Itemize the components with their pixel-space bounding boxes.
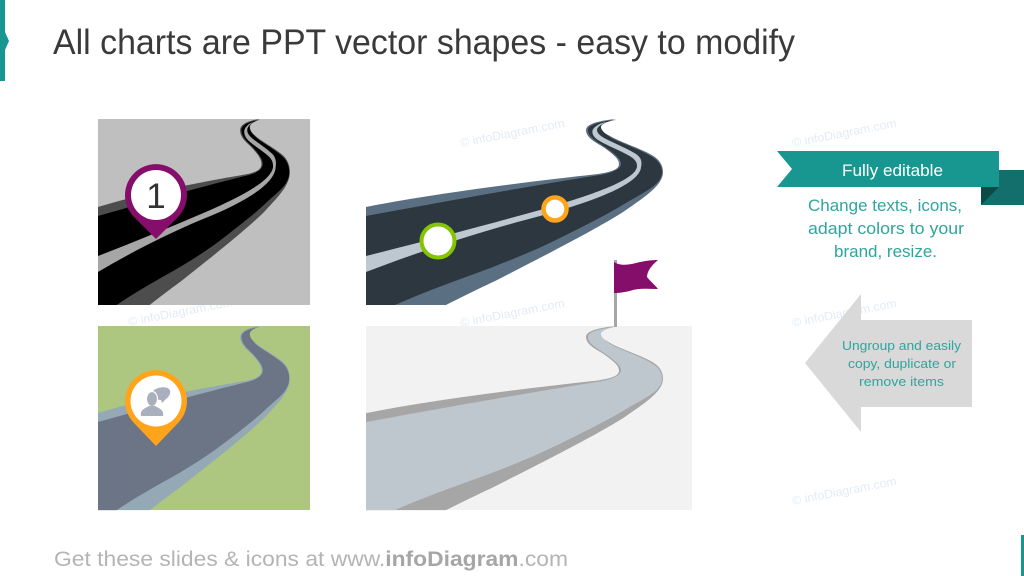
- panel: blue-grey road on green with person pin: [98, 326, 310, 510]
- text block: change texts: brand, resize.: [834, 243, 937, 261]
- ribbon front: [777, 151, 999, 187]
- text: © infoDiagram.com: [791, 296, 898, 330]
- road: dark slate: [366, 119, 663, 305]
- text: © infoDiagram.com: [459, 116, 566, 150]
- arrow text: copy, duplicate or: [848, 356, 957, 371]
- road: blue-grey: [98, 326, 290, 510]
- text block: change texts: adapt colors to your: [808, 220, 965, 238]
- footer: Get these slides & icons at www. infoDiagram .com: [54, 548, 568, 571]
- icon: flag on pole: [614, 260, 658, 327]
- panel: black road on grey with numbered pin: [98, 119, 310, 305]
- panel: light road with flag: [366, 260, 692, 510]
- text: © infoDiagram.com: [791, 116, 898, 150]
- road: light grey: [366, 326, 663, 510]
- text block: change texts: [808, 197, 965, 261]
- icon: person and speech bubble: [141, 387, 170, 416]
- marker: green circle: [422, 224, 454, 258]
- text: © infoDiagram.com: [459, 296, 566, 330]
- callout: fully editable ribbon: [777, 151, 1024, 205]
- arrow text: remove items: [859, 374, 945, 389]
- ribbon label: Fully editable: [842, 162, 943, 180]
- road: black: [98, 119, 290, 305]
- left accent bar: [0, 0, 9, 81]
- pin: person with speech bubble: [125, 370, 187, 446]
- ribbon back: [981, 170, 1024, 205]
- pin: number 1: 1: [146, 177, 166, 216]
- bottom right accent: [1021, 535, 1024, 576]
- panel: dark road with circle markers: [366, 119, 663, 305]
- pin: number 1: [125, 164, 187, 239]
- marker: orange circle: [544, 198, 566, 220]
- arrow text: Ungroup and easily: [842, 338, 962, 353]
- title: All charts are PPT vector shapes - easy to modify: [53, 22, 795, 62]
- text: © infoDiagram.com: [127, 295, 234, 329]
- arrow text: [842, 338, 962, 389]
- text block: change texts: Change texts, icons,: [808, 197, 962, 215]
- text: © infoDiagram.com: [791, 474, 898, 508]
- callout: grey arrow: [805, 294, 972, 432]
